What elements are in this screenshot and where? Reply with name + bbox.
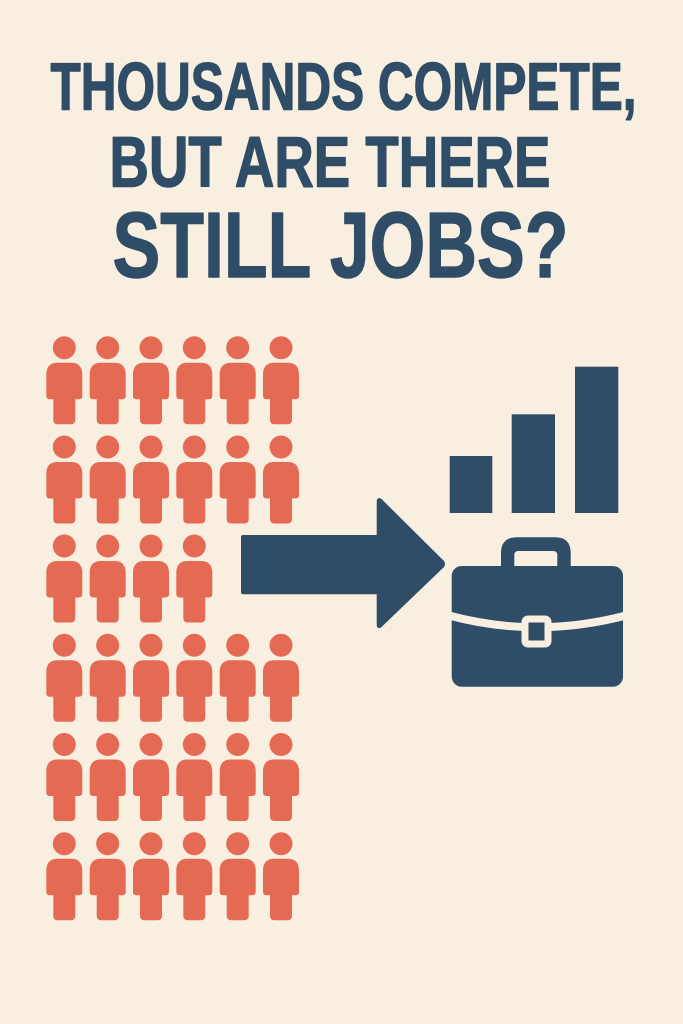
title bbox=[50, 50, 636, 297]
briefcase band bbox=[449, 616, 626, 627]
bar chart rising bbox=[450, 367, 618, 513]
people row 3 bbox=[46, 534, 212, 622]
bar medium bbox=[512, 414, 555, 513]
icon: briefcase bbox=[449, 537, 626, 687]
briefcase handle bbox=[501, 537, 571, 568]
arrow pointing to briefcase bbox=[241, 498, 445, 628]
people row 1 bbox=[46, 336, 299, 424]
crowd of people pictogram bbox=[46, 336, 299, 920]
people row 5 bbox=[46, 733, 299, 821]
briefcase buckle bbox=[525, 619, 548, 644]
people row 4 bbox=[46, 634, 299, 722]
briefcase body bbox=[452, 566, 623, 687]
people row 2 bbox=[46, 436, 299, 524]
bar tall bbox=[575, 367, 618, 513]
people row 6 bbox=[46, 832, 299, 920]
title line 2: BUT ARE THERE bbox=[110, 124, 550, 202]
bar small bbox=[450, 456, 492, 513]
